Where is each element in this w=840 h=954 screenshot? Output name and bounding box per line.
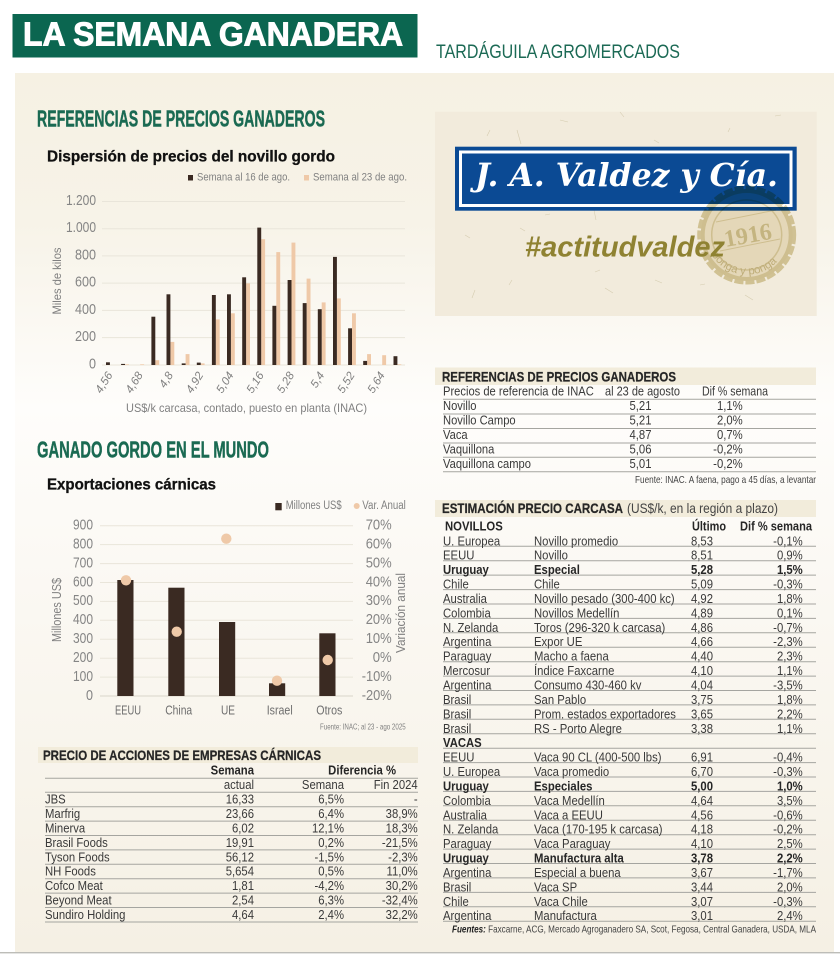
right axis labels: 0%	[373, 649, 392, 666]
column: diferencia: 1,1%	[777, 663, 803, 678]
bars: week to 23 Aug	[125, 239, 401, 365]
category labels: Israel	[267, 703, 293, 717]
column: ultimo: 4,64	[691, 793, 713, 808]
column: categoria: Especial a buena	[534, 865, 621, 880]
column: categoria: Vaca a EEUU	[534, 808, 603, 823]
table: acciones	[38, 747, 418, 922]
column: categoria: Novillo pesado (300-400 kc)	[534, 591, 675, 606]
y axis labels	[66, 192, 96, 372]
column: categoria: Consumo 430-460 kv	[534, 678, 642, 693]
left axis labels: 700	[73, 554, 93, 571]
column: categoria: Novillo promedio	[534, 534, 618, 549]
column: diferencia: -0,2%	[773, 822, 803, 837]
header: diferencia: Dif % semana	[740, 519, 813, 534]
column heading: diferencia: Diferencia %	[328, 763, 396, 778]
column: empresa: JBS	[45, 792, 66, 807]
column: categoria: Chile	[534, 577, 560, 592]
column: pais: Australia	[443, 808, 487, 823]
right axis labels: 70%	[366, 516, 392, 534]
column: categoria: Vaca Paraguay	[534, 836, 611, 851]
column: diferencia: -0,6%	[773, 808, 803, 823]
column: pais: Paraguay	[443, 649, 492, 664]
column: pais: Brasil	[443, 707, 471, 722]
column: precio actual: 4,64	[232, 907, 254, 922]
column: ultimo: 5,00	[691, 779, 713, 794]
x axis labels: 5,64	[366, 370, 388, 396]
column: pais: EEUU	[443, 548, 474, 563]
table: referencias INAC	[435, 368, 816, 486]
column: diferencia: -1,7%	[773, 865, 803, 880]
category labels	[115, 703, 342, 717]
column: ultimo: 3,75	[691, 692, 713, 707]
column: diferencia: 2,2%	[777, 851, 803, 866]
column: diferencia: 0,1%	[777, 606, 803, 621]
column: ultimo: 4,40	[691, 649, 713, 664]
column: ultimo: 6,91	[691, 750, 713, 765]
column: categoria: Precios de referencia de INAC	[443, 384, 594, 399]
logo box: J. A. Valdez y Cía.	[469, 156, 778, 194]
column: semana: 6,5%	[318, 792, 344, 807]
column: categoria: Especiales	[534, 779, 593, 794]
left axis labels	[73, 516, 93, 704]
column: precio actual: 1,81	[232, 878, 254, 893]
column: diferencia: 1,1%	[717, 398, 743, 413]
column: pais: VACAS	[443, 735, 482, 750]
column: pais: Brasil	[443, 880, 471, 895]
column: categoria: Novillos Medellín	[534, 606, 619, 621]
column: fin 2024: Fin 2024	[374, 777, 418, 792]
right axis labels	[362, 516, 392, 704]
left axis labels: 500	[73, 592, 93, 609]
column: diferencia: -0,1%	[773, 534, 803, 549]
column: categoria: Vaca 90 CL (400-500 lbs)	[534, 750, 662, 765]
left axis labels: 800	[73, 535, 93, 552]
column: precio actual: Semana	[211, 763, 254, 778]
legend	[188, 172, 407, 184]
column: precio	[629, 398, 652, 471]
column: pais: Argentina	[443, 865, 492, 880]
category labels: China	[165, 703, 192, 717]
axis titles: Millones US$	[49, 577, 64, 642]
column: pais	[443, 534, 500, 923]
x axis labels: 5,04	[215, 370, 237, 396]
column: categoria: Prom. estados exportadores	[534, 707, 676, 722]
column: empresa: Minerva	[45, 821, 85, 836]
column: semana: 2,4%	[318, 907, 344, 922]
left axis labels: 900	[73, 516, 93, 534]
column: semana: 0,5%	[318, 864, 344, 879]
column: categoria: Vaca	[443, 427, 468, 442]
column: precio actual: 23,66	[226, 806, 254, 821]
column: pais: Chile	[443, 577, 469, 592]
column: ultimo	[691, 534, 713, 923]
left axis labels: 400	[73, 611, 93, 628]
combo chart: exportaciones	[49, 500, 408, 731]
column: empresa: Brasil Foods	[45, 835, 108, 850]
column: pais: Colombia	[443, 606, 491, 621]
column: ultimo: 3,44	[691, 880, 713, 895]
column: pais: Uruguay	[443, 562, 489, 577]
column: pais: Australia	[443, 591, 487, 606]
column: pais: Chile	[443, 894, 469, 909]
column: semana: -4,2%	[314, 878, 344, 893]
column: categoria: Manufactura	[534, 908, 597, 923]
column: precio actual: actual	[224, 777, 254, 792]
column: categoria: Vaquillona campo	[443, 456, 531, 471]
column: empresa: NH Foods	[45, 864, 96, 879]
column: precio: 5,01	[629, 456, 652, 471]
column: fin 2024: -2,3%	[388, 850, 418, 865]
column: categoria: Novillo	[534, 548, 568, 563]
column: categoria: Vaca Medellín	[534, 793, 605, 808]
combo chart: exportaciones: Variación anual	[393, 573, 408, 653]
column: diferencia: 1,0%	[777, 779, 803, 794]
column: categoria	[443, 384, 594, 471]
left axis labels: 600	[73, 573, 93, 590]
column: ultimo: 4,10	[691, 836, 713, 851]
column: pais: Uruguay	[443, 779, 489, 794]
column: ultimo: 3,01	[691, 908, 713, 923]
column: ultimo: 8,53	[691, 534, 713, 549]
logo box	[455, 147, 797, 211]
right axis labels: -10%	[362, 668, 392, 685]
right axis labels: 30%	[366, 592, 392, 609]
column: diferencia: 2,3%	[777, 649, 803, 664]
left axis labels: 300	[73, 630, 93, 647]
y axis labels: 1.200	[66, 192, 96, 209]
column: diferencia: 1,5%	[777, 562, 803, 577]
column: pais: Colombia	[443, 793, 491, 808]
column: pais: U. Europea	[443, 534, 500, 549]
column: pais: Argentina	[443, 678, 492, 693]
ad panel: valdez	[435, 112, 817, 316]
column: categoria: Vaquillona	[443, 442, 495, 457]
right axis labels: 20%	[366, 611, 392, 628]
column: ultimo: 3,38	[691, 721, 713, 736]
column: pais: EEUU	[443, 750, 474, 765]
column: diferencia: -3,5%	[773, 678, 803, 693]
column: precio actual: 56,12	[226, 850, 254, 865]
column: diferencia: 2,5%	[777, 836, 803, 851]
column: precio: 4,87	[629, 427, 652, 442]
column: categoria: Vaca promedio	[534, 764, 609, 779]
column: ultimo: 4,86	[691, 620, 713, 635]
x axis labels: 4,68	[124, 370, 146, 396]
table: acciones: PRECIO DE ACCIONES DE EMPRESAS CÁRNICAS	[43, 747, 321, 763]
column: categoria: Macho a faena	[534, 649, 609, 664]
column: pais: Uruguay	[443, 851, 489, 866]
column: categoria: Expor UE	[534, 634, 582, 649]
column: semana: Semana	[302, 777, 344, 792]
column: pais: U. Europea	[443, 764, 500, 779]
y axis title: Miles de kilos	[50, 248, 64, 314]
header banner: LA SEMANA GANADERA	[23, 17, 403, 54]
table: referencias INAC: REFERENCIAS DE PRECIOS GANADEROS	[442, 369, 676, 385]
column: empresa	[45, 792, 125, 922]
column: categoria: Especial	[534, 562, 580, 577]
y axis labels: 800	[75, 246, 96, 263]
column: precio: 5,21	[629, 413, 652, 428]
column: fin 2024: -	[414, 792, 418, 807]
column: diferencia: -0,2%	[713, 442, 743, 457]
column: fin 2024: 30,2%	[386, 878, 418, 893]
column: diferencia: -0,3%	[773, 577, 803, 592]
left axis labels: 0	[86, 687, 93, 704]
right axis labels: 10%	[366, 630, 392, 647]
left axis labels: 200	[73, 649, 93, 666]
bars: week to 16 Aug	[106, 228, 397, 365]
column: fin 2024: 38,9%	[386, 806, 418, 821]
column: diferencia: 2,4%	[777, 908, 803, 923]
column: fin 2024	[374, 777, 418, 922]
column: diferencia: 1,8%	[777, 692, 803, 707]
column: categoria: Índice Faxcarne	[534, 662, 615, 678]
column: categoria: Vaca SP	[534, 880, 577, 895]
category labels: UE	[221, 703, 235, 717]
column: empresa: Marfrig	[45, 806, 80, 821]
column: diferencia: -0,7%	[773, 620, 803, 635]
seal 1916	[697, 186, 796, 284]
column: pais: Argentina	[443, 908, 492, 923]
column: pais: Argentina	[443, 634, 492, 649]
column: diferencia: 2,0%	[777, 880, 803, 895]
x axis labels: 4,92	[184, 370, 207, 396]
column: diferencia: 2,2%	[777, 707, 803, 722]
x axis labels: 5,4	[309, 370, 327, 390]
table: carcasa: ESTIMACIÓN PRECIO CARCASA	[442, 499, 623, 516]
column: ultimo: 3,07	[691, 894, 713, 909]
table: carcasa	[435, 499, 816, 936]
x axis title: US$/k carcasa, contado, puesto en planta (INAC)	[126, 401, 367, 415]
column: fin 2024: 18,3%	[386, 821, 418, 836]
column: pais: Brasil	[443, 692, 471, 707]
chart source: Fuente: INAC; al 23 - ago 2025	[320, 721, 406, 731]
legend: Millones US$	[286, 500, 342, 512]
column: precio: 5,06	[629, 442, 652, 457]
right axis labels: -20%	[362, 687, 392, 704]
column: precio actual: 16,33	[226, 792, 254, 807]
x axis labels	[94, 370, 388, 396]
column: ultimo: 4,10	[691, 663, 713, 678]
column: diferencia: -0,3%	[773, 894, 803, 909]
column: diferencia	[773, 534, 803, 923]
column: precio actual	[211, 763, 254, 922]
column: precio: 5,21	[629, 398, 652, 413]
column: diferencia: 0,9%	[777, 548, 803, 563]
column: ultimo: 4,89	[691, 606, 713, 621]
category labels: Otros	[316, 703, 342, 717]
column: ultimo: 3,67	[691, 865, 713, 880]
column: ultimo: 8,51	[691, 548, 713, 563]
legend: Var. Anual	[362, 500, 406, 512]
seal 1916: ponga y ponga	[710, 252, 778, 277]
column: diferencia: -2,3%	[773, 634, 803, 649]
column: fin 2024: 11,0%	[387, 864, 418, 879]
column: ultimo: 4,56	[691, 808, 713, 823]
section heading: ganado gordo: GANADO GORDO EN EL MUNDO	[37, 436, 269, 462]
x axis labels: 5,52	[336, 370, 358, 396]
hashtag: #actitudvaldez	[525, 232, 725, 264]
column: pais: N. Zelanda	[443, 822, 498, 837]
column: ultimo: 4,92	[691, 591, 713, 606]
column: precio actual: 5,654	[226, 864, 254, 879]
y axis labels: 600	[75, 274, 96, 291]
x axis labels: 4,56	[94, 370, 116, 396]
column: semana: 6,3%	[318, 893, 344, 908]
column: ultimo: 4,66	[691, 634, 713, 649]
column: empresa: Beyond Meat	[45, 893, 112, 908]
column: diferencia: 3,5%	[777, 793, 803, 808]
y axis labels: 0	[89, 355, 96, 372]
column: categoria: San Pablo	[534, 692, 586, 707]
column: categoria: Novillo	[443, 398, 477, 413]
column: diferencia: -0,4%	[773, 750, 803, 765]
column: ultimo: 4,04	[691, 678, 713, 693]
column: categoria: Vaca Chile	[534, 894, 588, 909]
left axis labels: 100	[73, 668, 93, 685]
column: semana: -1,5%	[314, 850, 344, 865]
column: precio actual: 19,91	[226, 835, 254, 850]
column: ultimo: 6,70	[691, 764, 713, 779]
column: categoria	[534, 534, 676, 923]
column: pais: Paraguay	[443, 836, 492, 851]
column: categoria: RS - Porto Alegre	[534, 721, 622, 736]
column: diferencia: 2,0%	[717, 413, 743, 428]
column: ultimo: 5,09	[691, 577, 713, 592]
header source: TARDÁGUILA AGROMERCADOS	[436, 42, 680, 63]
right axis labels: 40%	[366, 573, 392, 590]
x axis labels: 5,28	[275, 370, 297, 396]
column: categoria: Novillo Campo	[443, 413, 516, 428]
column: categoria: Vaca (170-195 k carcasa)	[534, 822, 663, 837]
column: pais: Brasil	[443, 721, 471, 736]
header: diferencia: Dif % semana	[702, 384, 769, 399]
column: ultimo: 3,78	[691, 851, 713, 866]
column: precio actual: 2,54	[232, 893, 254, 908]
column: categoria: Manufactura alta	[534, 851, 624, 866]
column: semana: 12,1%	[312, 821, 344, 836]
legend	[275, 500, 406, 512]
group heading: novillos: NOVILLOS	[445, 519, 503, 534]
table: carcasa: (US$/k, en la región a plazo)	[627, 500, 778, 516]
y axis labels: 400	[75, 301, 96, 318]
column: diferencia: -0,2%	[713, 456, 743, 471]
column: ultimo: 4,18	[691, 822, 713, 837]
dots: variacion	[121, 534, 333, 686]
x axis labels: 4,8	[157, 370, 176, 390]
column: empresa: Cofco Meat	[45, 878, 103, 893]
paper fibres	[465, 112, 781, 300]
column: semana: 6,4%	[318, 806, 344, 821]
column: diferencia: 1,8%	[777, 591, 803, 606]
column: diferencia: -0,3%	[773, 764, 803, 779]
column: ultimo: 5,28	[691, 562, 713, 577]
column: categoria: Toros (296-320 k carcasa)	[534, 620, 665, 635]
y axis labels: 200	[75, 328, 96, 345]
header: ultimo: Último	[692, 519, 726, 534]
chart title: dispersion: Dispersión de precios del novillo gordo	[47, 149, 335, 166]
column: ultimo: 3,65	[691, 707, 713, 722]
chart title: exportaciones: Exportaciones cárnicas	[47, 476, 216, 493]
bar chart: dispersion	[50, 172, 407, 415]
column: empresa: Sundiro Holding	[45, 907, 125, 922]
right axis labels: 60%	[366, 535, 392, 552]
column: fin 2024: -21,5%	[382, 835, 418, 850]
column: fin 2024: 32,2%	[386, 907, 418, 922]
category labels: EEUU	[115, 703, 141, 717]
column: diferencia	[713, 398, 743, 471]
column: precio actual: 6,02	[232, 821, 254, 836]
column: pais: N. Zelanda	[443, 620, 498, 635]
column: empresa: Tyson Foods	[45, 850, 110, 865]
legend: Semana al 23 de ago.	[313, 172, 407, 184]
x axis labels: 5,16	[245, 370, 267, 396]
section heading: referencias: REFERENCIAS DE PRECIOS GANADEROS	[37, 106, 325, 132]
column: semana	[302, 777, 344, 922]
column: pais: Mercosur	[443, 663, 490, 678]
bars: millones	[117, 580, 336, 696]
right axis labels: 50%	[366, 554, 392, 571]
seal 1916: 1916	[722, 219, 774, 253]
legend: Semana al 16 de ago.	[197, 172, 290, 184]
column: fin 2024: -32,4%	[382, 893, 418, 908]
column: diferencia: 1,1%	[777, 721, 803, 736]
header: fecha: al 23 de agosto	[605, 384, 680, 399]
column: diferencia: 0,7%	[717, 427, 743, 442]
column: semana: 0,2%	[318, 835, 344, 850]
y axis labels: 1.000	[66, 219, 96, 236]
